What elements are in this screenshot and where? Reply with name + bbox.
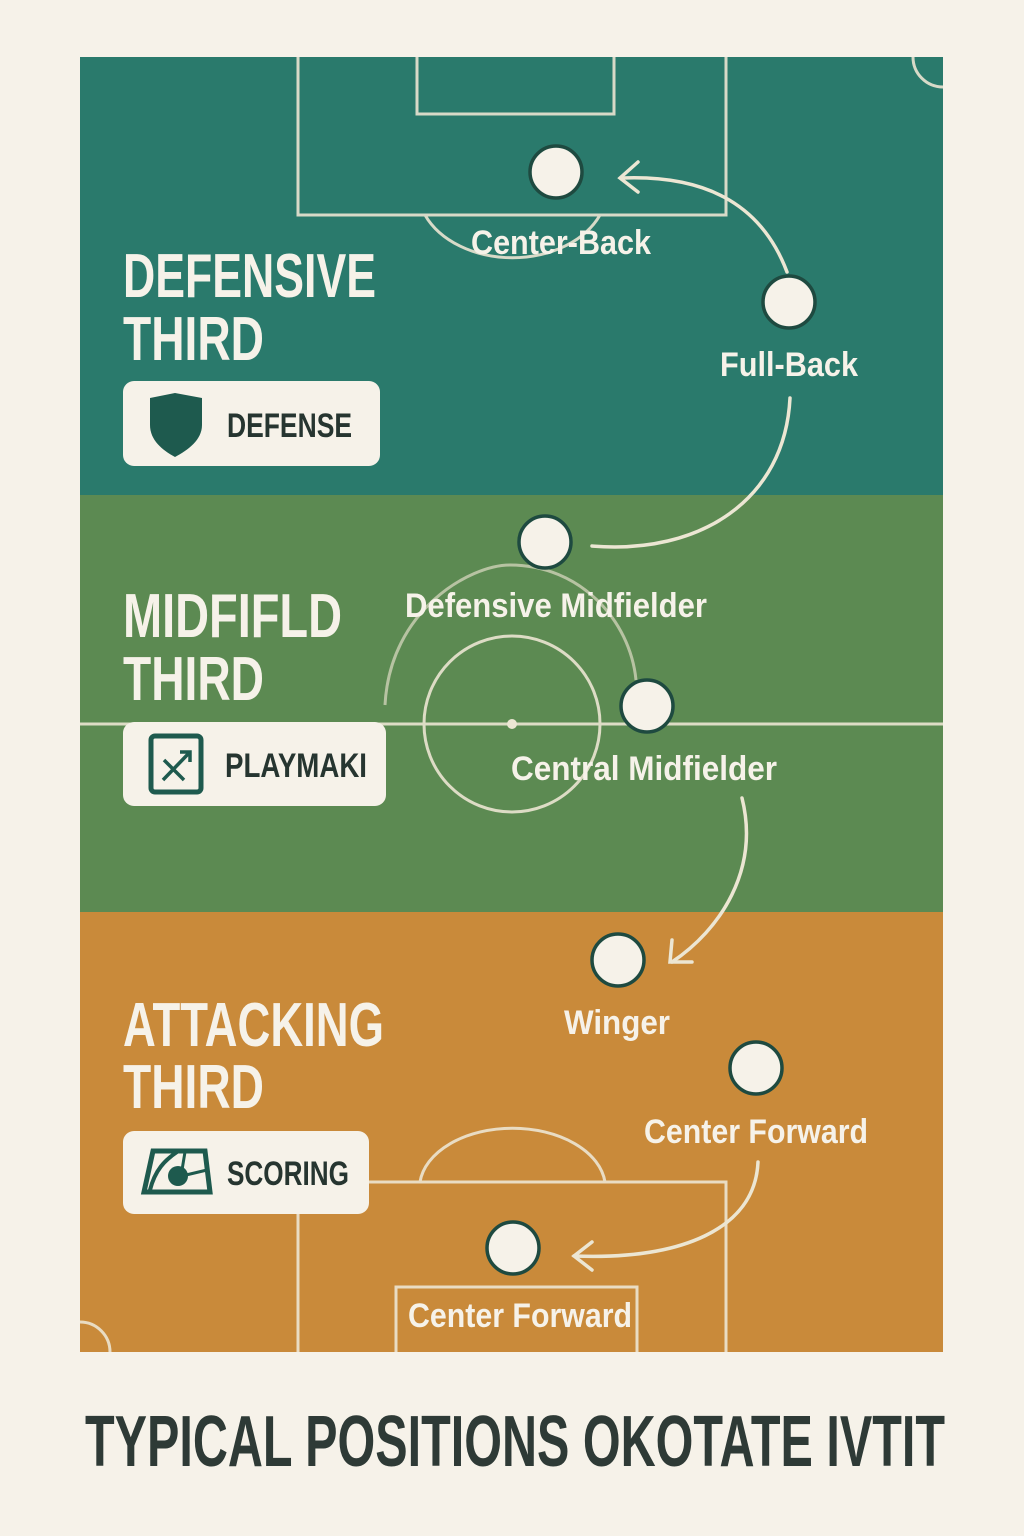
player labels: Central Midfielder [511, 750, 777, 788]
badge: playmaking [123, 722, 386, 806]
badge: defense [123, 381, 380, 466]
heading: midfield third: MIDFIFLD [123, 582, 342, 651]
player labels [405, 224, 868, 1335]
panel: midfield third [80, 495, 943, 912]
heading: midfield third: THIRD [123, 645, 264, 714]
heading: midfield third [123, 582, 342, 714]
heading: defensive third: DEFENSIVE [123, 242, 376, 311]
badge: defense: DEFENSE [227, 407, 352, 445]
heading: attacking third: ATTACKING [123, 991, 384, 1060]
player labels: Center Forward [408, 1297, 632, 1335]
panel: attacking third [80, 912, 943, 1352]
player labels: Center-Back [471, 224, 651, 262]
heading: defensive third: THIRD [123, 305, 264, 374]
player labels: Center Forward [644, 1113, 868, 1151]
panel: defensive third [80, 57, 943, 495]
players [487, 146, 815, 1274]
player labels: Defensive Midfielder [405, 587, 707, 625]
badge: scoring: SCORING [227, 1155, 349, 1193]
heading: defensive third [123, 242, 376, 374]
heading: attacking third: THIRD [123, 1053, 264, 1122]
player labels: Winger [564, 1004, 670, 1042]
heading: attacking third [123, 991, 384, 1122]
badge: playmaking: PLAYMAKI [225, 747, 367, 785]
arrows [574, 162, 790, 1270]
badge: scoring [123, 1131, 369, 1214]
player labels: Full-Back [720, 346, 858, 384]
